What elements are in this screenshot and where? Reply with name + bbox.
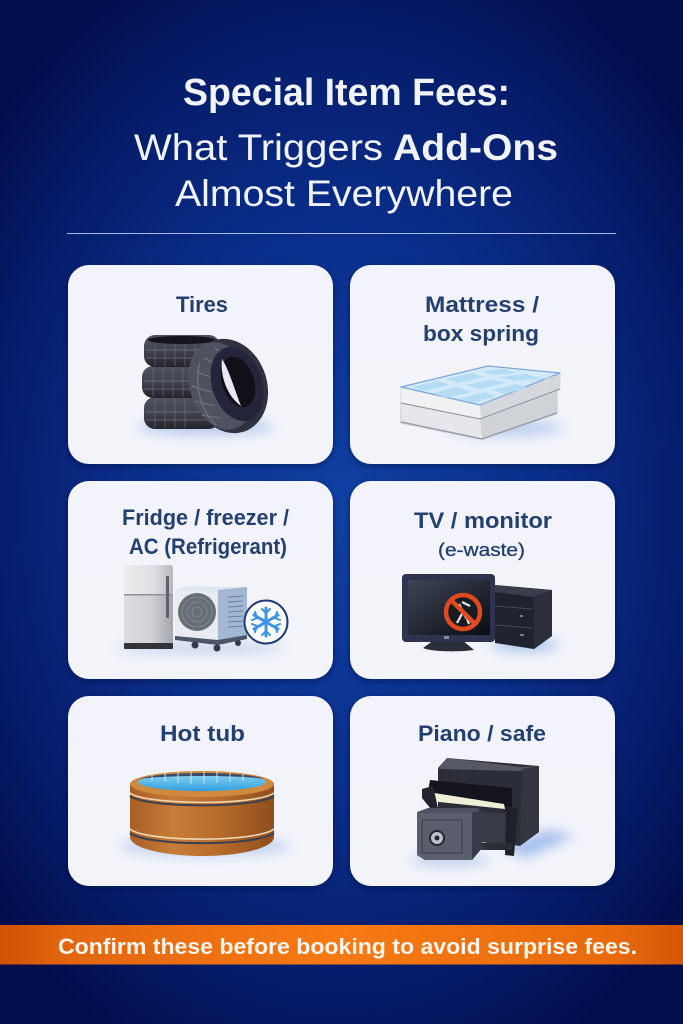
heading: TV: TV / monitor <box>414 508 552 533</box>
heading: hot tub: Hot tub <box>160 721 245 746</box>
icon: snowflake badge <box>244 600 288 644</box>
icon: no e-waste symbol <box>446 595 480 629</box>
title: Almost Everywhere <box>175 173 513 214</box>
title: Special Item Fees: <box>183 72 510 114</box>
icon: safe <box>410 808 490 865</box>
icon: tire stack <box>137 329 280 443</box>
panel: TV / monitor <box>350 481 615 679</box>
card background <box>350 696 615 886</box>
icon: fridge <box>115 565 285 653</box>
icon: monitor <box>402 574 495 651</box>
panel: piano / safe <box>350 696 615 886</box>
title: What Triggers <box>134 127 383 168</box>
heading: fridge: Fridge / freezer / <box>122 505 289 530</box>
heading: fridge: AC (Refrigerant) <box>129 534 287 559</box>
panel: fridge / AC <box>68 481 333 679</box>
panel: mattress <box>350 265 615 464</box>
heading: piano: Piano / safe <box>418 721 546 746</box>
heading: tires: Tires <box>176 292 228 317</box>
heading: mattress: Mattress / <box>425 292 539 317</box>
heading: fridge <box>122 505 289 559</box>
icon: piano <box>422 758 575 858</box>
icon: computer tower <box>491 585 559 651</box>
title: Add-Ons <box>393 127 558 168</box>
card background <box>350 481 615 679</box>
card background <box>68 696 333 886</box>
heading: mattress: box spring <box>423 321 539 346</box>
panel: tires <box>68 265 333 464</box>
banner text: Confirm these before booking to avoid surprise fees. <box>58 934 637 959</box>
card background <box>68 265 333 464</box>
banner <box>0 925 683 964</box>
card background <box>68 481 333 679</box>
heading: mattress <box>423 292 539 346</box>
card background <box>350 265 615 464</box>
icon: AC unit <box>175 586 247 652</box>
panel: hot tub <box>68 696 333 886</box>
icon: mattress <box>401 366 563 439</box>
heading: TV <box>414 508 552 560</box>
heading: TV: (e-waste) <box>438 540 525 560</box>
title <box>134 72 558 214</box>
icon: hot tub <box>120 770 290 856</box>
